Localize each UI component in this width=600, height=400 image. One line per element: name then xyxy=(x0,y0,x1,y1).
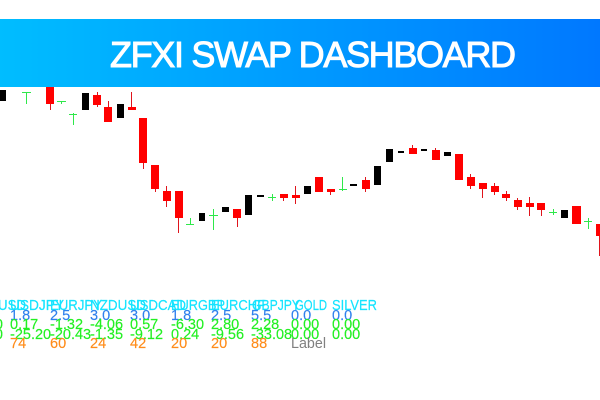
row: swap short values: -33.08 xyxy=(251,327,292,343)
row: currency pair names: SILVER xyxy=(332,298,377,314)
row: swap long values: 2.28 xyxy=(251,317,279,333)
row: spread values: 5.5 xyxy=(251,308,271,324)
row: swap short values: 0.24 xyxy=(171,327,199,343)
row: swap short values: -20.43 xyxy=(50,327,91,343)
banner background xyxy=(0,19,600,87)
row: swap long values xyxy=(0,317,360,333)
red wicks xyxy=(50,87,600,256)
row: swap short values: 0.00 xyxy=(291,327,319,343)
row: swap short values: 0.00 xyxy=(332,327,360,343)
row: orange values xyxy=(10,336,267,352)
row: spread values: 2.5 xyxy=(211,308,231,324)
title: ZFXI SWAP DASHBOARD xyxy=(110,34,516,75)
row: currency pair names: NZDUSD xyxy=(90,298,146,314)
row: spread values: 1.8 xyxy=(10,308,30,324)
row: currency pair names: GBPJPY xyxy=(252,298,300,314)
row: swap short values xyxy=(0,327,360,343)
row: currency pair names xyxy=(0,298,377,314)
swap data table xyxy=(0,298,377,352)
row: orange values: 20 xyxy=(171,336,187,352)
row: spread values: 3.0 xyxy=(130,308,150,324)
row: swap long values: 0.17 xyxy=(10,317,38,333)
row: currency pair names: USDJPY xyxy=(10,298,64,314)
row: swap short values: -9.12 xyxy=(130,327,163,343)
candlestick chart xyxy=(0,86,600,256)
row: spread values: 2.5 xyxy=(50,308,70,324)
row: spread values: 0.0 xyxy=(332,308,352,324)
row: orange values: 42 xyxy=(130,336,146,352)
row: swap long values: 2.80 xyxy=(211,317,239,333)
row: currency pair names: GOLD xyxy=(295,298,327,314)
row: swap long values: 0.00 xyxy=(291,317,319,333)
row: swap long values: -4.06 xyxy=(90,317,123,333)
row: orange values: 74 xyxy=(10,336,26,352)
row: orange values: 24 xyxy=(90,336,106,352)
green doji candles xyxy=(11,86,592,230)
title banner xyxy=(0,19,600,87)
row: swap long values: 0.57 xyxy=(130,317,158,333)
row: currency pair names: USDCAD xyxy=(130,298,186,314)
row: orange values: 60 xyxy=(50,336,66,352)
row: swap long values: 0.00 xyxy=(332,317,360,333)
row: spread values: 3.0 xyxy=(90,308,110,324)
row: swap long values: -1.32 xyxy=(50,317,83,333)
black candle bodies xyxy=(0,90,568,221)
row: currency pair names: EURGBP xyxy=(171,298,225,314)
row: spread values: 0.0 xyxy=(291,308,311,324)
row: swap short values: -1.35 xyxy=(90,327,123,343)
row: currency pair names: EURJPY xyxy=(50,298,102,314)
row: spread values xyxy=(10,308,352,324)
row: swap short values: -25.20 xyxy=(10,327,51,343)
row: swap long values: -6.30 xyxy=(171,317,204,333)
row: orange values: 20 xyxy=(211,336,227,352)
row: currency pair names: EURCHF xyxy=(211,298,265,314)
row: orange values: 88 xyxy=(251,336,267,352)
label text: Label xyxy=(291,336,326,352)
red candle bodies xyxy=(46,87,600,236)
row: swap short values: -9.56 xyxy=(211,327,244,343)
row: spread values: 1.8 xyxy=(171,308,191,324)
